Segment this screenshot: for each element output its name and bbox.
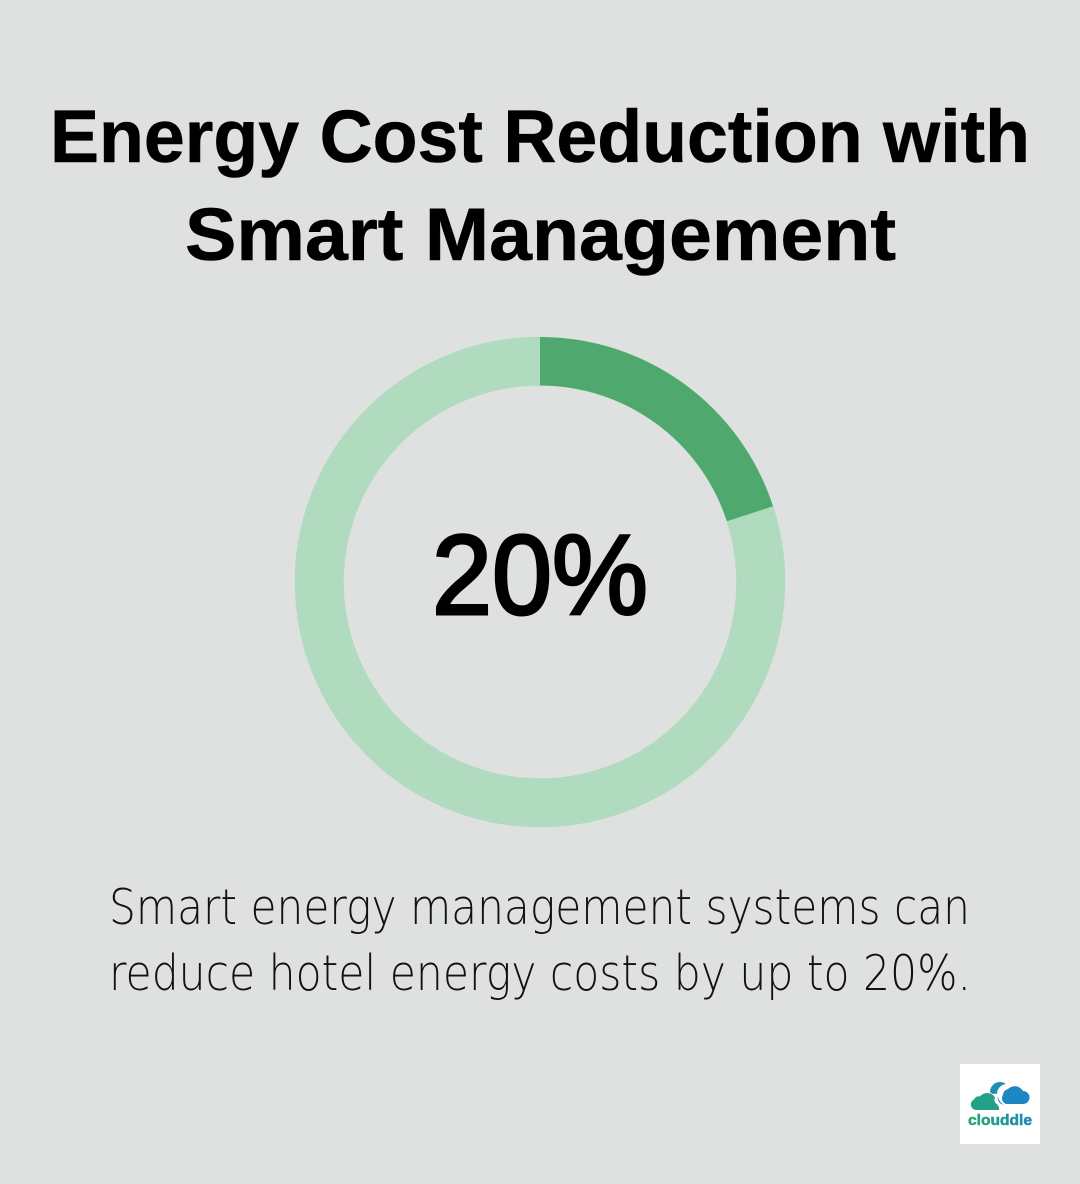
description text: reduce hotel energy costs by up to 20%.	[109, 945, 971, 1002]
title: Energy Cost Reduction with	[50, 95, 1030, 178]
icon: crescent	[990, 1082, 1006, 1105]
title	[50, 95, 1030, 276]
title: Smart Management	[185, 193, 896, 276]
center value: 20%	[432, 512, 648, 638]
description text	[109, 879, 971, 1002]
logo wordmark: clouddle	[968, 1113, 1032, 1129]
icon: right cloud	[1002, 1086, 1030, 1104]
donut chart: 20 percent	[319, 337, 773, 803]
description text: Smart energy management systems can	[109, 879, 970, 936]
icon: left cloud	[971, 1093, 999, 1110]
logo: clouddle	[960, 1064, 1040, 1144]
